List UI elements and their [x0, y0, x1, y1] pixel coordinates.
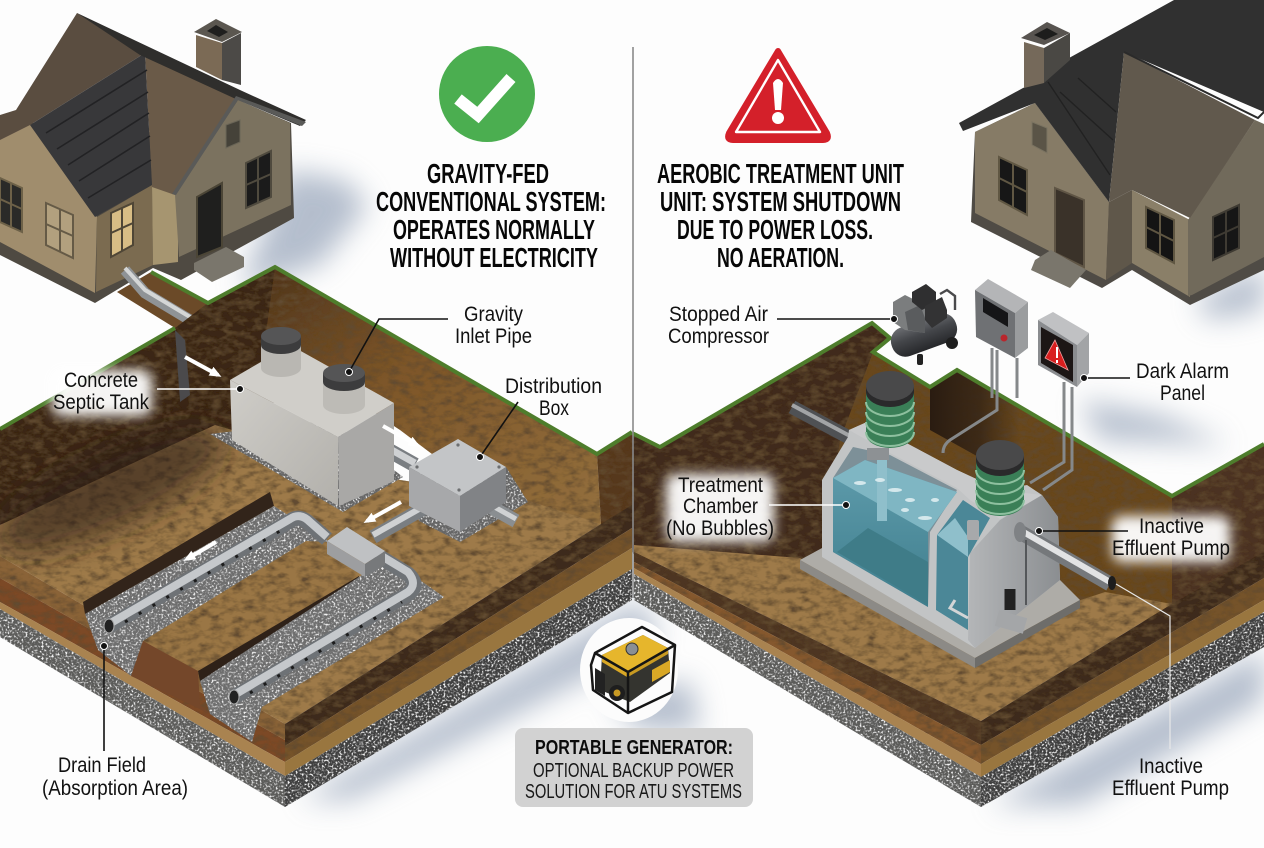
- callout box: portable generator: [515, 728, 753, 807]
- callout: concrete septic tank: Concrete: [64, 369, 138, 392]
- green grass edges: [0, 267, 632, 454]
- control conduits: [943, 348, 1072, 490]
- icon: portable generator: [580, 618, 678, 722]
- pipes between tank and boxes: [365, 435, 516, 537]
- ground shadows: [240, 170, 1264, 805]
- soil block: pit walls: [632, 323, 1264, 680]
- green grass edges: [632, 323, 1264, 496]
- house: conventional system: [0, 13, 306, 303]
- callout: dark alarm panel: Dark Alarm: [1136, 360, 1229, 383]
- callout box: portable generator: PORTABLE GENERATOR:: [535, 737, 733, 759]
- callout: drain field: [42, 642, 188, 800]
- callout: inactive effluent pump, upper: [1036, 515, 1230, 560]
- callout: concrete septic tank: Septic Tank: [53, 391, 149, 414]
- soil block: floor surface: [634, 545, 1172, 721]
- callout: treatment chamber: Treatment: [678, 474, 763, 497]
- ATU tank cutaway: [822, 422, 1060, 648]
- callout: gravity inlet pipe: [346, 303, 532, 376]
- soil layers: front faces: [0, 505, 632, 807]
- icon: green check mark: [439, 46, 535, 142]
- heading: aerobic treatment unit: DUE TO POWER LOSS.: [677, 214, 873, 245]
- control panel box: [975, 279, 1028, 358]
- heading: aerobic treatment unit: [657, 158, 904, 273]
- callout: treatment chamber: [666, 474, 850, 540]
- soil block: pit walls: [0, 267, 632, 525]
- drain field trenches: [83, 492, 444, 742]
- callout: drain field: (Absorption Area): [42, 777, 188, 800]
- heading: conventional system: CONVENTIONAL SYSTEM:: [376, 186, 606, 217]
- green risers with lids: [866, 371, 1024, 516]
- concrete septic tank: [230, 327, 394, 506]
- junction box: [327, 527, 385, 577]
- flow arrows: [185, 357, 417, 559]
- panel: gravity-fed conventional system: [0, 13, 632, 807]
- callout: stopped air compressor: Compressor: [668, 325, 769, 348]
- divider: [632, 47, 634, 598]
- inlet trench and pipe from house: [117, 268, 242, 363]
- callout box: portable generator: OPTIONAL BACKUP POWER: [533, 760, 734, 782]
- callout box: portable generator: SOLUTION FOR ATU SYSTEMS: [525, 781, 742, 803]
- callout: treatment chamber: Chamber: [683, 495, 758, 518]
- callout: concrete septic tank: [53, 369, 244, 414]
- concrete base slab: [800, 548, 1080, 668]
- callout: inactive effluent pump, lower: Effluent Pump: [1112, 777, 1229, 800]
- soil layers: front faces: [634, 552, 1264, 807]
- callout: stopped air compressor: Stopped Air: [669, 303, 768, 326]
- callout: inactive effluent pump, lower: [1112, 584, 1229, 800]
- gravel bed under tank and distribution box: [210, 420, 528, 542]
- heading: conventional system: [376, 158, 606, 273]
- callout: gravity inlet pipe: Inlet Pipe: [455, 325, 532, 348]
- callout: distribution box: Box: [539, 397, 569, 420]
- callout: distribution box: [476, 375, 602, 460]
- callout: dark alarm panel: Panel: [1160, 382, 1205, 405]
- callout: inactive effluent pump, lower: Inactive: [1139, 755, 1203, 778]
- callout: drain field: Drain Field: [58, 754, 146, 777]
- callout: gravity inlet pipe: Gravity: [464, 303, 523, 326]
- dark alarm panel: [1038, 312, 1089, 387]
- house: ATU system: [959, 0, 1264, 305]
- distribution box: [409, 439, 506, 532]
- heading: aerobic treatment unit: NO AERATION.: [717, 242, 844, 273]
- heading: conventional system: OPERATES NORMALLY: [393, 214, 595, 245]
- stopped air compressor: [887, 284, 961, 365]
- perforated distribution pipes: [104, 516, 414, 704]
- callout: inactive effluent pump, upper: Effluent Pump: [1112, 537, 1230, 560]
- heading: conventional system: WITHOUT ELECTRICITY: [390, 242, 598, 273]
- callout: inactive effluent pump, upper: Inactive: [1139, 515, 1204, 538]
- panel: aerobic treatment unit: [632, 0, 1264, 807]
- heading: conventional system: GRAVITY-FED: [427, 158, 549, 189]
- soil block: floor surface: [0, 403, 601, 724]
- callout: distribution box: Distribution: [505, 375, 602, 398]
- effluent pipe and pump: [997, 522, 1116, 626]
- icon: red warning triangle: [728, 51, 828, 140]
- callout: stopped air compressor: [668, 303, 898, 348]
- heading: aerobic treatment unit: UNIT: SYSTEM SHUTDOWN: [660, 186, 901, 217]
- heading: aerobic treatment unit: AEROBIC TREATMENT UNIT: [657, 158, 904, 189]
- callout: treatment chamber: (No Bubbles): [666, 517, 774, 540]
- inlet pipe: [792, 405, 850, 438]
- label halos: [52, 370, 1230, 562]
- callout: dark alarm panel: [1080, 360, 1229, 405]
